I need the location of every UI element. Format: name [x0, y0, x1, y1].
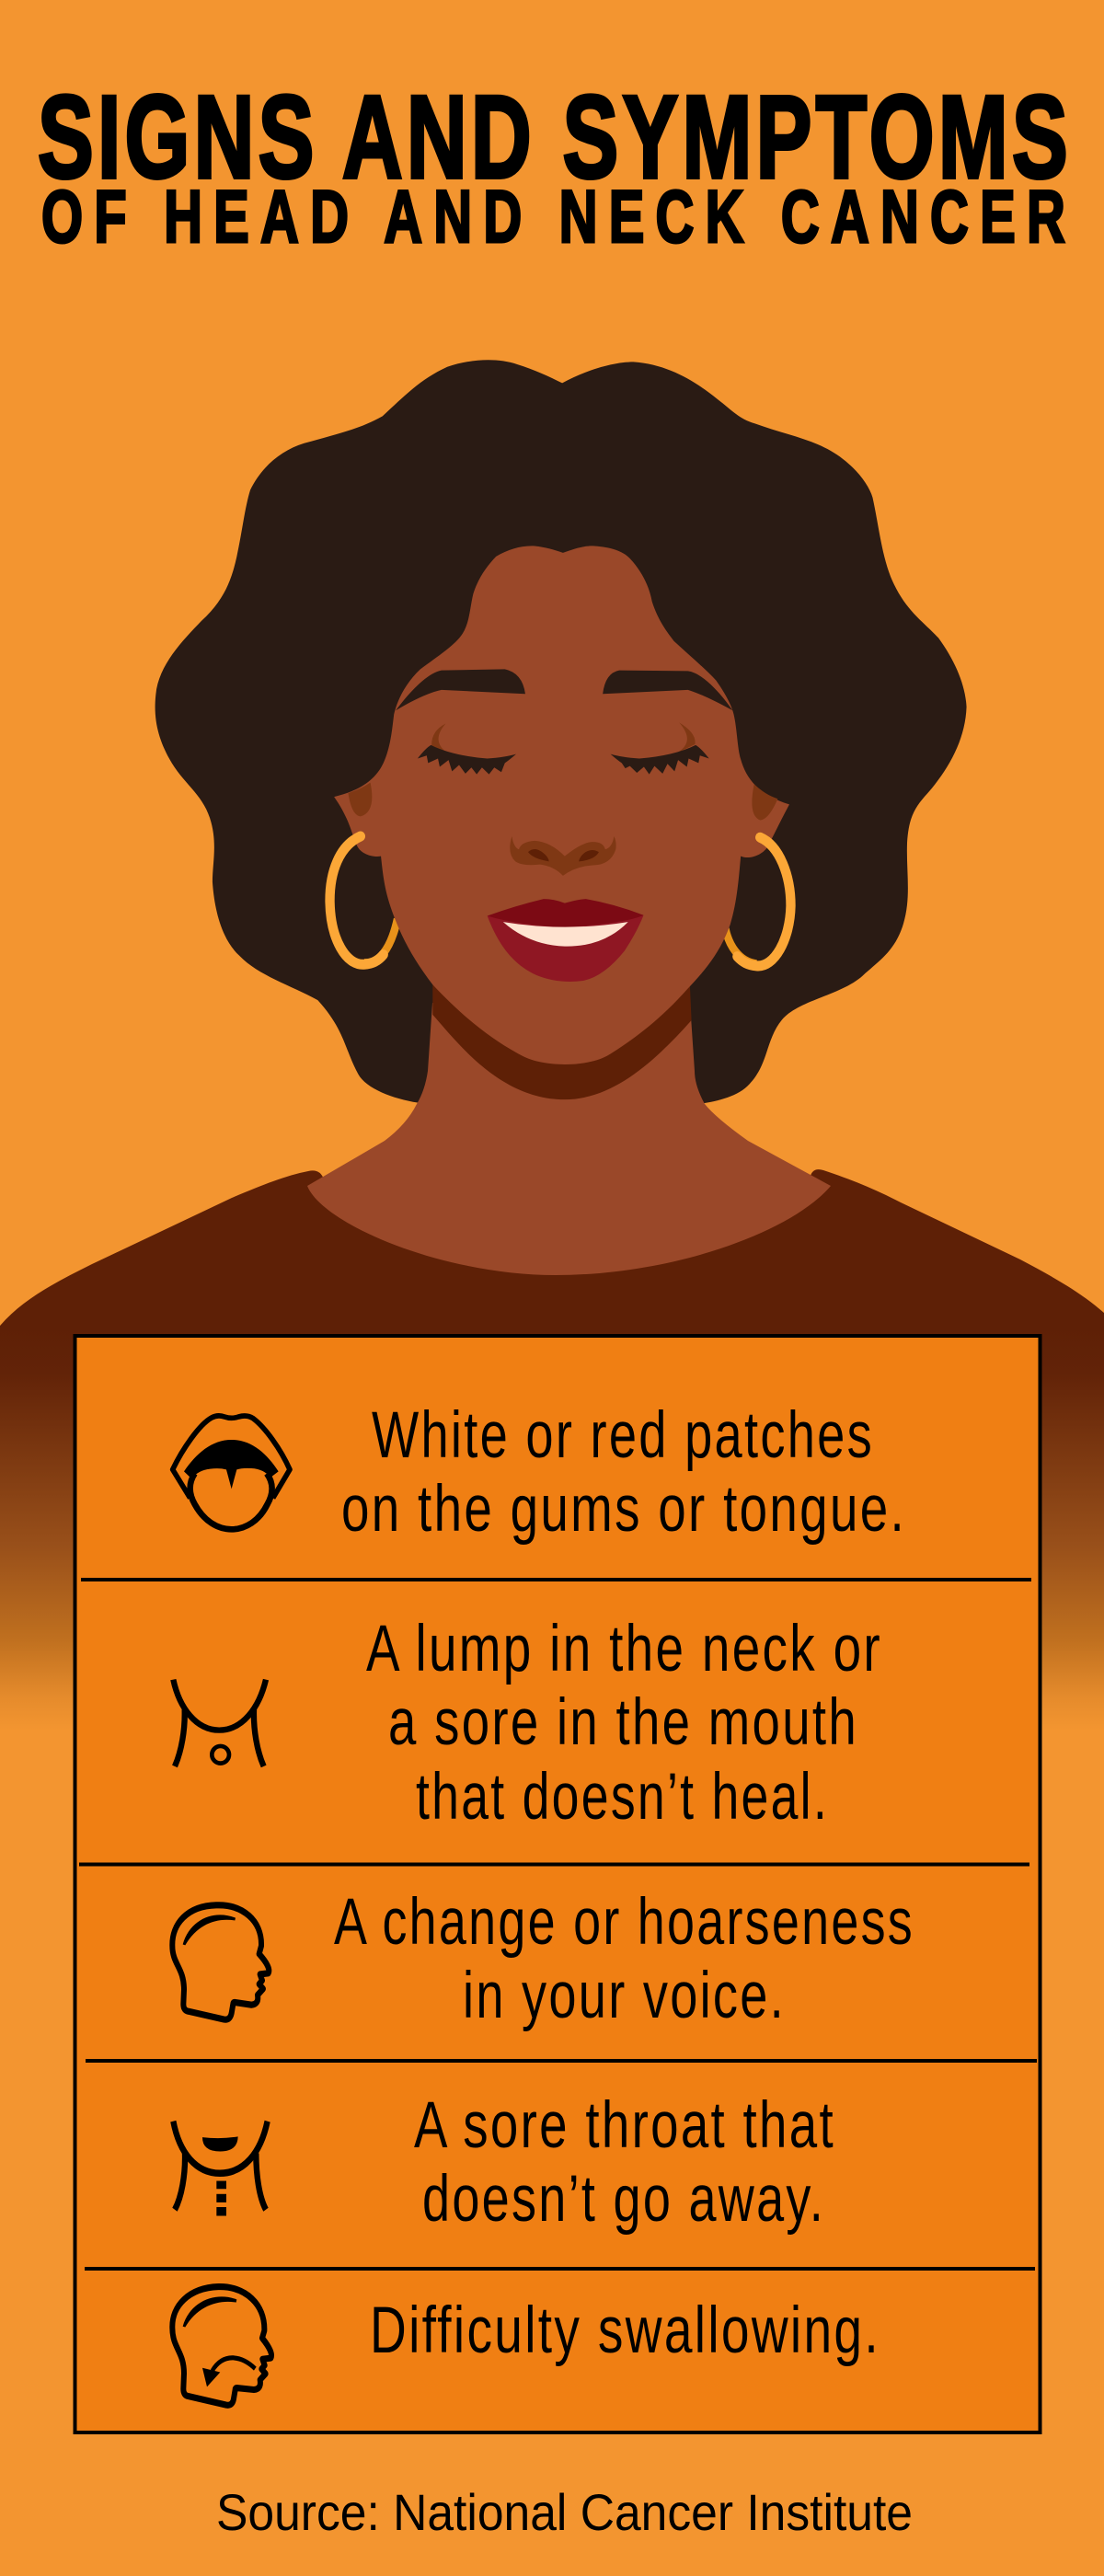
text: on the gums or tongue.: [341, 1473, 906, 1546]
face: [334, 546, 789, 1064]
eyebrows: [396, 669, 732, 710]
icon: head with swallow arrow: [172, 2287, 271, 2405]
source line: Source: National Cancer Institute: [216, 2483, 913, 2541]
text: [414, 2089, 835, 2236]
shirt with gradient fade: [0, 1169, 1104, 1734]
text: A change or hoarseness: [334, 1886, 914, 1959]
hair: [155, 360, 967, 1104]
ear shadows: [348, 783, 777, 820]
earrings: [330, 836, 791, 966]
earring back parts: [364, 919, 756, 964]
icon: throat with soreness: [173, 2122, 268, 2216]
lower lip: [488, 915, 644, 982]
upper lip: [488, 899, 644, 927]
text: Difficulty swallowing.: [370, 2294, 880, 2367]
symptoms panel: [75, 1336, 1040, 2432]
row 4: sore throat: [173, 2089, 835, 2236]
text: White or red patches: [372, 1399, 874, 1472]
text: [366, 1613, 882, 1834]
teeth: [503, 922, 628, 947]
text: A lump in the neck or: [366, 1613, 882, 1685]
row 3: change or hoarseness: [172, 1886, 914, 2032]
text: doesn’t go away.: [422, 2163, 825, 2236]
text: that doesn’t heal.: [416, 1761, 829, 1834]
eyelashes: [418, 745, 709, 775]
icon: head profile: [172, 1905, 269, 2019]
neck shadow: [432, 981, 692, 1099]
row 5: difficulty swallowing: [172, 2287, 880, 2405]
text: a sore in the mouth: [388, 1686, 858, 1759]
text: in your voice.: [463, 1960, 786, 2032]
nostrils: [528, 849, 599, 861]
row 2: lump or sore: [173, 1613, 882, 1834]
nose: [510, 836, 616, 876]
title: [38, 72, 1076, 259]
icon: neck with lump: [173, 1680, 266, 1766]
neck: [307, 1003, 831, 1275]
illustration: woman portrait: [0, 360, 1104, 1734]
text: [341, 1399, 906, 1546]
row 1: white or red patches: [173, 1399, 906, 1546]
text: A sore throat that: [414, 2089, 835, 2162]
eyelid creases: [431, 722, 696, 754]
text: [334, 1886, 914, 2032]
icon: mouth and tongue: [173, 1416, 290, 1529]
